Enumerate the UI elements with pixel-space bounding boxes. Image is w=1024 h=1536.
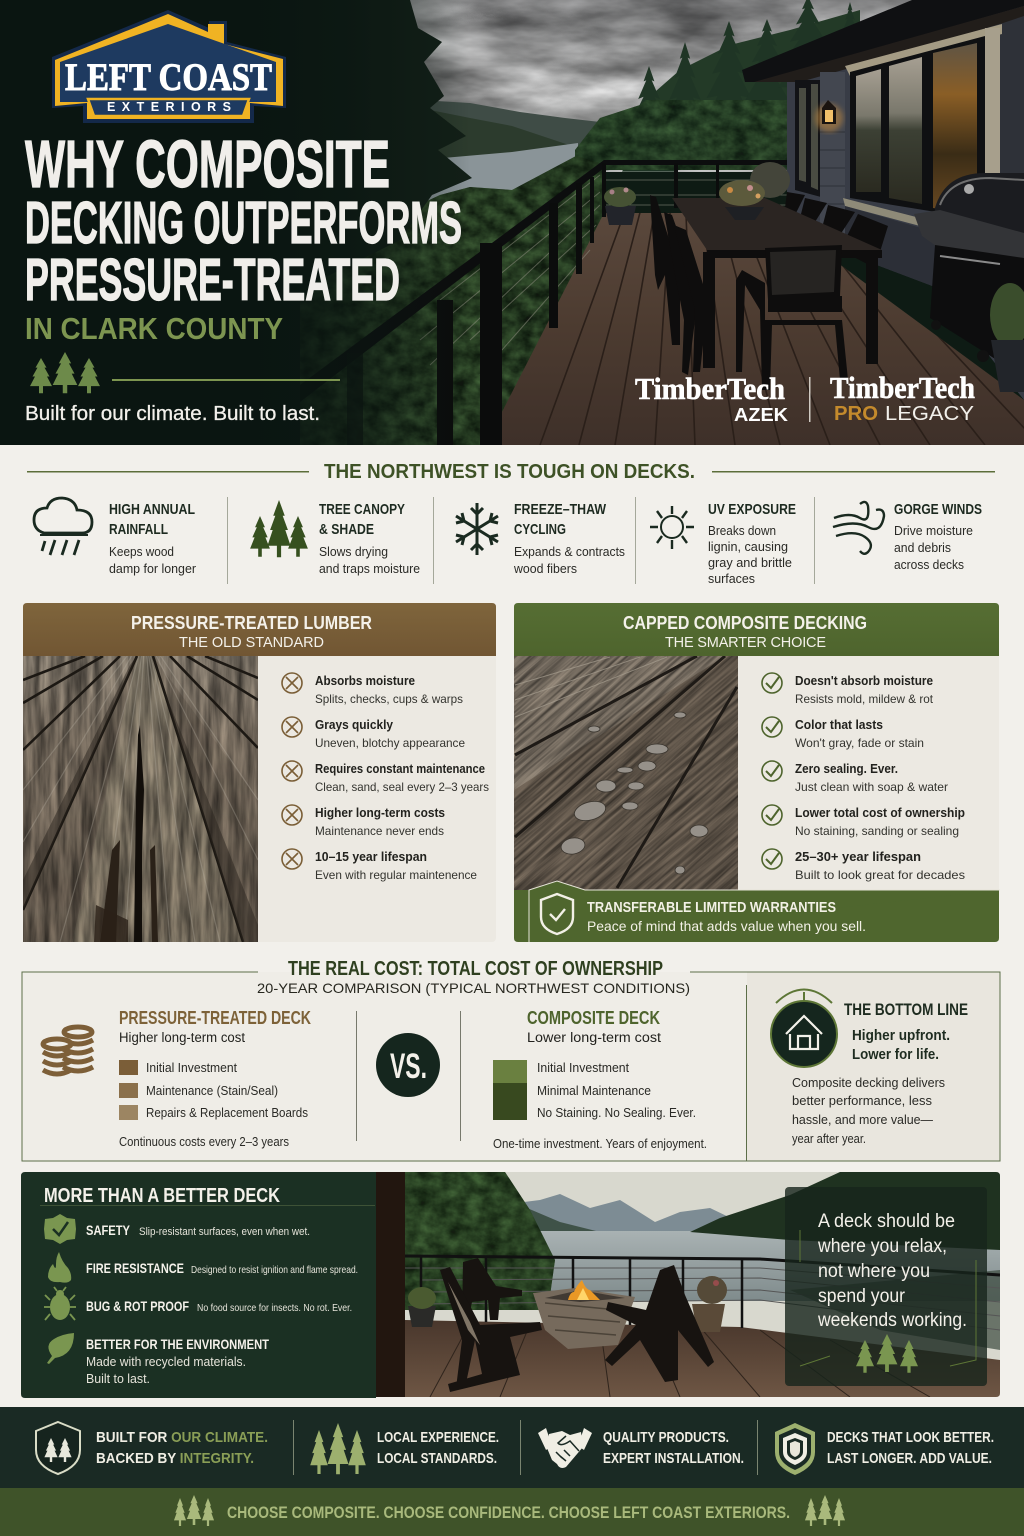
hero photo: evergreen forest: [300, 0, 862, 445]
wall lantern: [815, 100, 843, 132]
trust: quality products: EXPERT INSTALLATION.: [603, 1450, 744, 1467]
climate: high annual rainfall: Keeps wood: [109, 545, 174, 559]
logo: TimberTech AZEK: TimberTech: [635, 371, 785, 406]
benefit: bug and rot proof: BUG & ROT PROOF: [86, 1298, 189, 1314]
panel heading: THE SMARTER CHOICE: [665, 635, 826, 651]
logo: Left Coast Exteriors: LEFT COAST: [65, 56, 272, 99]
climate: gorge winds: GORGE WINDS: [894, 501, 982, 518]
hero photo: grill: [914, 173, 1024, 365]
panel heading: THE OLD STANDARD: [179, 635, 324, 651]
callout: the bottom line: THE BOTTOM LINE: [844, 1000, 968, 1019]
icon: handshake: [538, 1428, 592, 1468]
panel: more than a better deck: [21, 1172, 376, 1398]
warranty banner: [514, 881, 1000, 942]
item: color that lasts: Color that lasts: [795, 717, 883, 732]
climate: freeze-thaw cycling: Expands & contracts: [514, 545, 625, 559]
climate: gorge winds: Drive moisture: [894, 524, 973, 538]
climate: freeze-thaw cycling: [456, 501, 625, 576]
deck floor: [405, 1320, 1000, 1397]
warranty banner: TRANSFERABLE LIMITED WARRANTIES: [587, 900, 836, 916]
item: long-term costs: Maintenance never ends: [315, 824, 444, 838]
climate: high annual rainfall: damp for longer: [109, 562, 196, 576]
title: [25, 127, 462, 313]
climate: UV exposure: Breaks down: [708, 524, 776, 538]
icon: trees: [856, 1334, 918, 1373]
icon: left trees: [174, 1495, 214, 1526]
quote overlay: not where you: [818, 1261, 930, 1282]
item: long-term costs: Higher long-term costs: [315, 805, 445, 820]
comparison: composite deck: Initial Investment: [537, 1061, 630, 1075]
item: lower cost: Lower total cost of ownership: [795, 805, 965, 820]
climate: high annual rainfall: HIGH ANNUAL: [109, 501, 195, 518]
photo: composite boards with water beads: [514, 656, 738, 890]
hero photo: cable railing: [300, 160, 787, 445]
list: pressure-treated drawbacks: [282, 673, 489, 882]
trust: built for our climate: BUILT FOR OUR CLIMATE.: [96, 1429, 268, 1446]
icon: coin stacks: [43, 1027, 93, 1074]
benefit: environment: BETTER FOR THE ENVIRONMENT: [86, 1336, 269, 1352]
icon: house badge: [771, 990, 837, 1067]
climate: tree canopy and shade: and traps moisture: [319, 562, 420, 576]
benefit: environment: Built to last.: [86, 1372, 150, 1386]
panel heading: MORE THAN A BETTER DECK: [44, 1185, 280, 1207]
climate: gorge winds: and debris: [894, 541, 951, 555]
comparison: composite deck: Minimal Maintenance: [537, 1084, 651, 1098]
climate: freeze-thaw cycling: FREEZE–THAW: [514, 501, 607, 518]
callout: the bottom line: hassle, and more value—: [792, 1112, 933, 1127]
badge: versus: [376, 1033, 440, 1097]
climate: freeze-thaw cycling: CYCLING: [514, 521, 566, 538]
item: lifespan: [282, 849, 477, 882]
benefit: fire resistance: FIRE RESISTANCE: [86, 1260, 184, 1276]
hero banner: [0, 0, 1024, 445]
panel heading: CAPPED COMPOSITE DECKING: [623, 612, 867, 633]
item: lifespan: [762, 849, 965, 882]
comparison: pressure-treated deck: Initial Investment: [146, 1061, 238, 1075]
comparison: pressure-treated deck: Maintenance (Stain/Seal): [146, 1084, 278, 1098]
trust: decks that look better: [775, 1423, 994, 1475]
climate: gorge winds: across decks: [894, 558, 964, 572]
hero photo: composite deck surface: [502, 213, 1024, 445]
hero rule: [112, 379, 340, 381]
hero photo: distant mountains and river: [420, 100, 620, 205]
icon: layered shield: [775, 1423, 815, 1475]
item: constant maintenance: Clean, sand, seal every 2–3 years: [315, 780, 489, 794]
icon: shield with trees: [36, 1422, 80, 1474]
section: total cost of ownership: [22, 958, 1000, 1161]
section heading: THE REAL COST: TOTAL COST OF OWNERSHIP: [288, 958, 663, 980]
climate: UV exposure: [650, 501, 796, 586]
callout: the bottom line: better performance, less: [792, 1093, 932, 1108]
item: zero sealing: [762, 761, 948, 794]
comparison: composite deck: One-time investment. Years of enjoyment.: [493, 1137, 707, 1151]
benefit: safety: Slip-resistant surfaces, even when wet.: [139, 1226, 310, 1238]
climate: tree canopy and shade: TREE CANOPY: [319, 501, 405, 518]
panel heading: PRESSURE-TREATED LUMBER: [131, 612, 372, 633]
water droplets: [560, 712, 708, 874]
callout: the bottom line: Lower for life.: [852, 1047, 939, 1063]
item: lower cost: [762, 805, 965, 838]
climate: tree canopy and shade: Slows drying: [319, 545, 388, 559]
post: [376, 1172, 405, 1397]
hero photo: dining table and chairs: [650, 180, 888, 390]
item: lifespan: 10–15 year lifespan: [315, 849, 427, 864]
section subheading: 20-YEAR COMPARISON (TYPICAL NORTHWEST CONDITIONS): [257, 980, 690, 996]
title: PRESSURE-TREATED: [25, 247, 400, 313]
trust: built for our climate: BACKED BY INTEGRITY.: [96, 1450, 254, 1467]
logo: TimberTech AZEK: [635, 371, 788, 425]
item: zero sealing: Zero sealing. Ever.: [795, 761, 898, 776]
section: the Northwest is tough on decks: [27, 461, 995, 586]
call to action band: [0, 1488, 1024, 1536]
tagline: Built for our climate. Built to last.: [25, 403, 320, 425]
badge: versus: VS.: [390, 1047, 427, 1086]
subtitle: in Clark County: IN CLARK COUNTY: [25, 311, 283, 346]
comparison: composite deck: COMPOSITE DECK: [527, 1008, 660, 1028]
item: absorbs moisture: [282, 673, 463, 706]
item: no moisture absorption: Doesn't absorb moisture: [795, 673, 933, 688]
trust: quality products: [538, 1428, 744, 1468]
benefit: safety: SAFETY: [86, 1222, 131, 1238]
benefit: fire resistance: [48, 1252, 358, 1283]
comparison: composite deck: No Staining. No Sealing. Ever.: [537, 1106, 696, 1120]
quote overlay: where you relax,: [817, 1236, 947, 1257]
item: lifespan: Even with regular maintenence: [315, 868, 477, 882]
trust: local experience: [310, 1423, 499, 1474]
callout: the bottom line: Composite decking delivers: [792, 1075, 945, 1090]
item: lifespan: 25–30+ year lifespan: [795, 849, 921, 864]
climate: UV exposure: surfaces: [708, 572, 755, 586]
icon: warranty shield: [541, 894, 573, 934]
item: no moisture absorption: [762, 673, 934, 706]
panel heading: [623, 612, 867, 651]
item: grays quickly: [282, 717, 465, 750]
logo: Left Coast Exteriors: EXTERIORS: [107, 100, 231, 114]
hero photo: potted plant: [990, 283, 1024, 392]
logo: TimberTech AZEK: AZEK: [734, 405, 788, 425]
photo: deck overlooking a lake: [376, 1172, 1000, 1397]
icon: three trees: [30, 352, 100, 393]
logo: TimberTech Pro Legacy: PRO: [834, 403, 878, 425]
railing: [405, 1256, 1000, 1330]
item: constant maintenance: [282, 761, 489, 794]
item: zero sealing: Just clean with soap & water: [795, 780, 948, 794]
climate: gorge winds: [833, 501, 982, 572]
climate: tree canopy and shade: [250, 500, 420, 576]
item: grays quickly: Grays quickly: [315, 717, 394, 732]
comparison: composite deck: [493, 1008, 707, 1151]
climate: UV exposure: lignin, causing: [708, 540, 788, 554]
photo: weathered pressure-treated boards: [23, 633, 258, 942]
item: absorbs moisture: Absorbs moisture: [315, 673, 415, 688]
climate: freeze-thaw cycling: wood fibers: [513, 562, 577, 576]
icon: right trees: [805, 1495, 845, 1526]
title: WHY COMPOSITE: [25, 127, 390, 202]
comparison: pressure-treated deck: PRESSURE-TREATED DECK: [119, 1008, 311, 1028]
logo: TimberTech Pro Legacy: [830, 370, 975, 425]
hero photo: tall fir silhouette: [280, 0, 472, 300]
climate: high annual rainfall: [34, 498, 196, 576]
comparison: pressure-treated deck: Continuous costs every 2–3 years: [119, 1135, 289, 1149]
callout: the bottom line: [771, 990, 968, 1146]
hero photo: house wall, roof and windows: [742, 0, 1024, 400]
hero photo: planters: [604, 162, 790, 225]
dark overlay behind title: [0, 0, 470, 445]
trust: built for our climate: [36, 1422, 268, 1474]
comparison: pressure-treated deck: Repairs & Replacement Boards: [146, 1106, 308, 1120]
item: color that lasts: [762, 717, 924, 750]
panel heading: [131, 612, 372, 651]
quote overlay: A deck should be: [818, 1211, 955, 1232]
trust: local experience: LOCAL EXPERIENCE.: [377, 1429, 499, 1446]
trust: local experience: LOCAL STANDARDS.: [377, 1450, 497, 1467]
item: lower cost: No staining, sanding or sealing: [795, 824, 959, 838]
item: no moisture absorption: Resists mold, mildew & rot: [795, 692, 934, 706]
benefit: environment: [47, 1333, 269, 1386]
benefit: bug and rot proof: No food source for insects. No rot. Ever.: [197, 1302, 352, 1314]
comparison: pressure-treated deck: Higher long-term cost: [119, 1030, 245, 1045]
title: DECKING OUTPERFORMS: [25, 190, 462, 256]
item: color that lasts: Won't gray, fade or stain: [795, 736, 924, 750]
planters: [408, 1276, 727, 1332]
item: grays quickly: Uneven, blotchy appearance: [315, 736, 465, 750]
benefit: bug and rot proof: [44, 1287, 352, 1320]
climate: UV exposure: gray and brittle: [708, 556, 792, 570]
benefit: environment: Made with recycled materials.: [86, 1355, 246, 1369]
panel: pressure-treated lumber: [23, 603, 496, 942]
callout: the bottom line: year after year.: [792, 1131, 866, 1146]
benefit: fire resistance: Designed to resist ignition and flame spread.: [191, 1264, 358, 1276]
comparison: pressure-treated deck: [119, 1008, 311, 1149]
warranty banner: Peace of mind that adds value when you sell.: [587, 918, 866, 934]
callout: the bottom line: Higher upfront.: [852, 1028, 950, 1044]
Adirondack chairs: [440, 1258, 714, 1392]
logo divider: [809, 377, 810, 422]
footer band: trust points: [0, 1407, 1024, 1488]
panel: capped composite decking: [514, 603, 1000, 942]
quote overlay: [785, 1187, 987, 1386]
climate: UV exposure: UV EXPOSURE: [708, 501, 796, 518]
logo: Left Coast Exteriors: [52, 10, 286, 123]
call to action band: CHOOSE COMPOSITE. CHOOSE CONFIDENCE. CHOOSE LEFT COAST EXTERIORS.: [227, 1503, 790, 1522]
comparison: composite deck: Lower long-term cost: [527, 1030, 661, 1045]
logo: TimberTech Pro Legacy: TimberTech: [830, 370, 975, 405]
item: long-term costs: [282, 805, 445, 838]
item: constant maintenance: Requires constant maintenance: [315, 761, 485, 776]
quote overlay: spend your: [818, 1286, 906, 1307]
climate: tree canopy and shade: & SHADE: [319, 521, 374, 538]
climate: high annual rainfall: RAINFALL: [109, 521, 168, 538]
list: composite benefits: [762, 673, 965, 882]
item: lifespan: Built to look great for decades: [795, 868, 965, 882]
benefit: safety: [44, 1214, 310, 1244]
item: absorbs moisture: Splits, checks, cups & warps: [315, 692, 463, 706]
trust: quality products: QUALITY PRODUCTS.: [603, 1429, 729, 1446]
hero photo: stormy sky: [380, 0, 1024, 172]
heading: THE NORTHWEST IS TOUGH ON DECKS.: [324, 461, 695, 483]
logo: TimberTech Pro Legacy: LEGACY: [885, 403, 974, 425]
quote overlay: weekends working.: [817, 1310, 967, 1331]
fire pit: [533, 1280, 635, 1349]
